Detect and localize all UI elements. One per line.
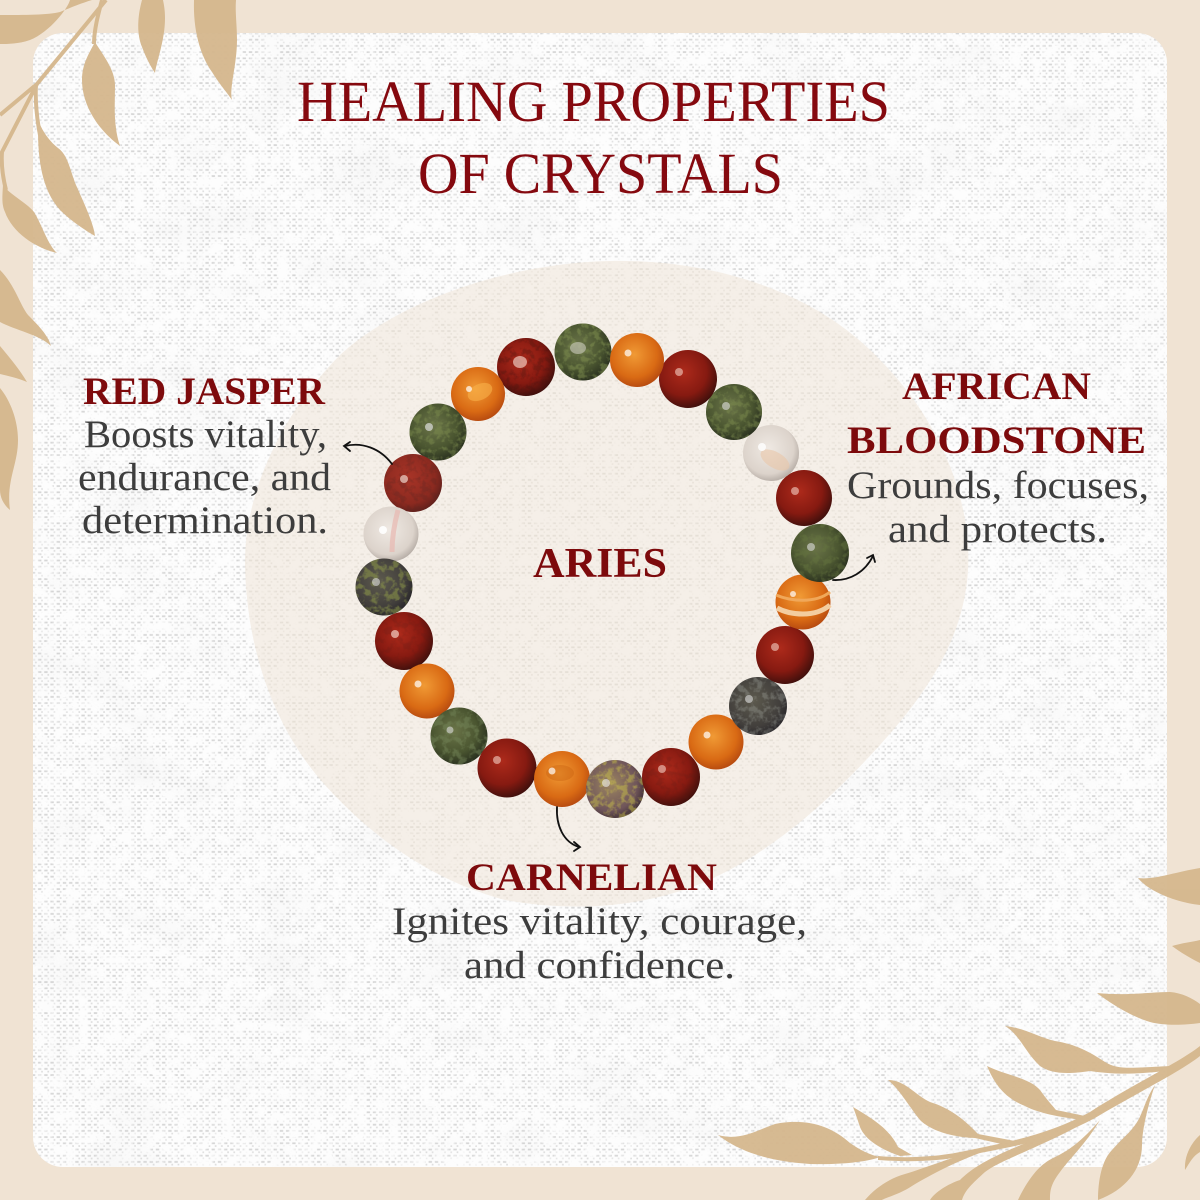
bead: red 8 [375,612,433,670]
callout: Red Jasper [78,370,332,542]
arrow: to Red Jasper [344,442,392,464]
bead: white agate 21 [743,425,799,481]
bead: green 4 [410,404,466,460]
leaf: hanging long [38,120,95,236]
callout: Carnelian [392,856,807,987]
arrow: to African Bloodstone [833,555,875,580]
bead: red 2 [497,338,555,396]
center label: Aries: ARIES [533,541,667,587]
leaf: small left [853,1107,912,1156]
cream blob behind bracelet [245,261,968,907]
bead: red jasper 5 [384,454,442,512]
leaf: lower far left [865,1146,990,1200]
bead: orange 3 [451,367,505,421]
leaf: mid small [987,1066,1090,1121]
title [297,69,890,206]
callout: African Bloodstone: and protects. [888,508,1107,551]
leaf: far corner [1185,1135,1200,1170]
callout: African Bloodstone: AFRICAN [902,365,1091,408]
bracelet [356,324,849,818]
arrow: to Carnelian [557,807,580,851]
callout: Carnelian: Ignites vitality, courage, [392,900,807,943]
leaf: left middle [0,270,51,346]
leaf: right upper [1138,868,1200,905]
leaf: right small [1172,940,1200,963]
bead: dark bloodstone 7 [356,558,412,616]
leaves: bottom right corner [718,868,1200,1200]
leaf: top small [138,0,165,73]
bead: green 1 [554,324,612,380]
bead: red 20 [776,470,832,526]
bead: white agate 6 [364,506,418,562]
callout: African Bloodstone: BLOODSTONE [847,419,1146,462]
bead: orange 24 [610,333,664,387]
callout: Red Jasper: determination. [82,499,328,542]
bead: green 22 [706,384,762,440]
bead: red 17 [756,626,814,684]
leaf: right lower [1097,992,1200,1025]
callout: African Bloodstone [847,365,1149,551]
bead: red 14 [642,748,700,806]
callout: Carnelian: and confidence. [464,944,735,987]
bead: orange 12 [534,751,590,807]
bead: green 19 [791,524,849,582]
leaf: hanging centre [82,42,120,146]
stems [0,0,106,190]
bead: green 10 [430,708,488,764]
leaf: top right large [194,0,237,100]
bead: banded orange 18 [776,574,830,630]
bead: purple bloodstone 13 [586,760,644,818]
leaf: lower second [930,1120,1090,1200]
leaf: left bottom [0,388,18,510]
leaf: far left [718,1122,880,1164]
leaf: lower left [2,185,57,253]
callout: Red Jasper: RED JASPER [83,370,326,413]
bead: red 11 [478,738,536,798]
bead: dark bloodstone 16 [729,677,787,735]
bead: orange 9 [400,664,454,718]
leaf: top big [0,0,92,44]
callout: Red Jasper: endurance, and [78,456,332,499]
main stem [878,1046,1200,1161]
leaf: lower third [1018,1120,1100,1200]
bead: red 23 [659,350,717,408]
title: OF CRYSTALS [418,141,783,206]
leaf: left lower small [0,346,27,382]
callout: Red Jasper: Boosts vitality, [84,413,327,456]
leaves: top left corner [0,0,237,510]
leaf: lower right [1098,1085,1155,1200]
callout: African Bloodstone: Grounds, focuses, [847,464,1149,507]
leaf: mid long [888,1080,1020,1146]
bead: orange 15 [688,714,744,770]
callout: Carnelian: CARNELIAN [466,856,717,899]
leaf: upper long [1005,1026,1170,1074]
title: HEALING PROPERTIES [297,69,890,134]
